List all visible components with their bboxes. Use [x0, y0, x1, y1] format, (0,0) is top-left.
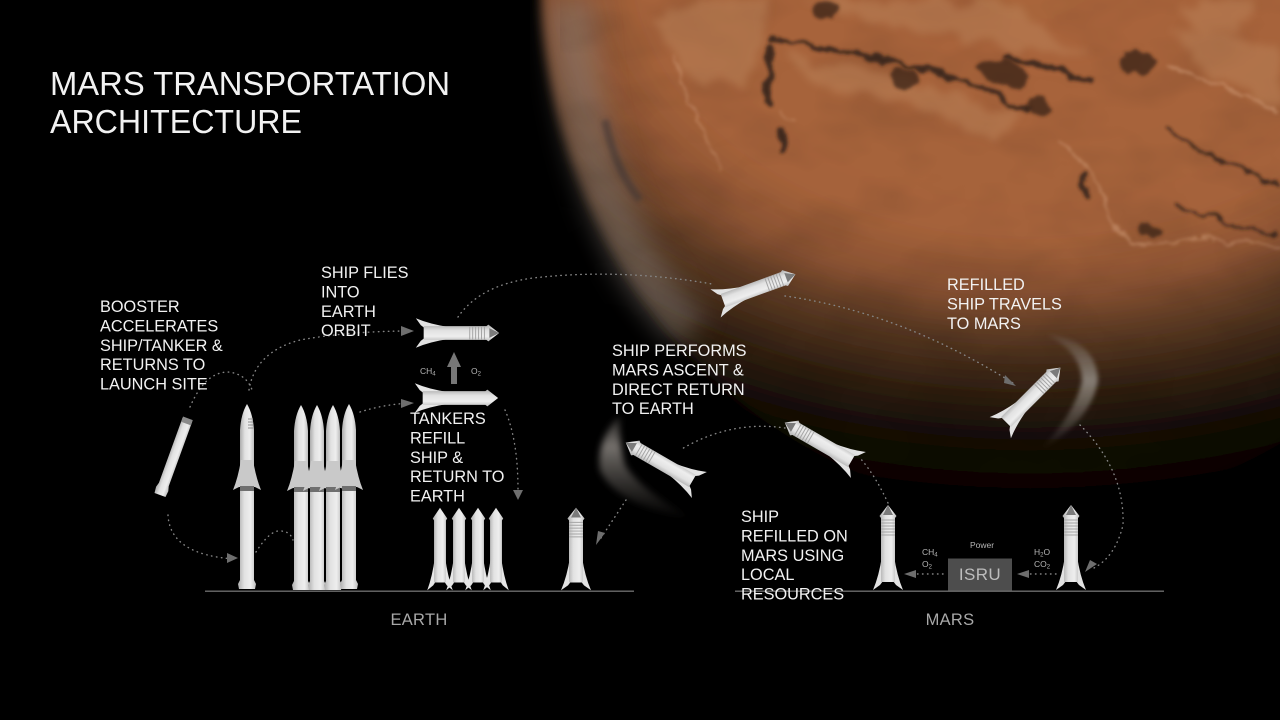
label: products: 4 [934, 552, 938, 558]
label: mars: MARS [926, 611, 974, 629]
step: booster: SHIP/TANKER & [100, 337, 223, 355]
step: tankers: EARTH [410, 488, 465, 506]
surface mottling [582, 0, 1280, 301]
step: earth orbit: INTO [321, 283, 360, 301]
label: CH4 transfer: 4 [432, 372, 436, 378]
path: tankers to orbit [360, 403, 412, 412]
step: refill on mars: SHIP [741, 508, 779, 526]
step: mars ascent: MARS ASCENT & [612, 361, 744, 379]
label: inputs: 2 [1047, 564, 1051, 570]
stack: tankers on boosters [287, 404, 363, 590]
limb cloud streak [605, 120, 640, 200]
step: tankers: RETURN TO [410, 468, 504, 486]
label: inputs: H [1034, 547, 1040, 557]
step: refilled ship: SHIP TRAVELS [947, 295, 1062, 313]
smoke trail: returning ship [599, 415, 695, 520]
step: mars ascent: TO EARTH [612, 400, 694, 418]
path: earth to mars part 2 [785, 296, 1013, 383]
path: tankers return [505, 410, 518, 490]
step: tankers: REFILL [410, 429, 465, 447]
label: products: O [922, 559, 929, 569]
label: inputs: O [1043, 547, 1050, 557]
step: earth orbit: ORBIT [321, 322, 371, 340]
ship outbound above mars [710, 260, 801, 317]
path: earth to mars part 1 [458, 274, 712, 317]
step: refill on mars: LOCAL [741, 566, 794, 584]
lighter eroded highlands [650, 0, 1280, 140]
title: ARCHITECTURE [50, 103, 302, 140]
path: ISRU intake [1022, 573, 1056, 575]
path: mars landing [1080, 425, 1123, 569]
title: MARS TRANSPORTATION [50, 65, 450, 102]
step: refill on mars: REFILLED ON [741, 527, 848, 545]
ISRU plant: ISRU [959, 565, 1001, 584]
propellant transfer arrow [447, 352, 461, 384]
step: tankers: TANKERS [410, 410, 486, 428]
path: booster landing [168, 515, 235, 559]
step: refilled ship: TO MARS [947, 315, 1021, 333]
tanker in orbit [415, 383, 498, 413]
path: ISRU output [910, 573, 943, 575]
falling booster [154, 416, 194, 497]
path: booster to stack [256, 531, 293, 552]
step: refill on mars: MARS USING [741, 547, 844, 565]
smoke trail: refilled ship [1040, 334, 1098, 450]
canyon shadows [769, 40, 1278, 232]
ISRU plant [948, 558, 1012, 590]
ship on mars, refilled [873, 505, 903, 590]
ship ascending from mars [777, 410, 866, 478]
step: tankers: SHIP & [410, 449, 463, 467]
label: products: 2 [929, 564, 933, 570]
step: booster: LAUNCH SITE [100, 376, 208, 394]
step: booster: RETURNS TO [100, 356, 205, 374]
arrowheads [227, 326, 1097, 578]
step: mars ascent: DIRECT RETURN [612, 381, 745, 399]
ship on earth pad [561, 508, 591, 590]
label: earth: EARTH [390, 611, 448, 629]
canyon basins [816, 0, 1163, 237]
refilled ship travelling [990, 357, 1071, 438]
ground line: mars [735, 590, 1164, 592]
step: mars ascent: SHIP PERFORMS [612, 342, 746, 360]
canyon highlights [672, 55, 1278, 250]
label: inputs: 2 [1040, 552, 1044, 558]
label: inputs: CO [1034, 559, 1047, 569]
upper limb haze [572, 0, 690, 330]
mars globe [540, 0, 1280, 510]
path: booster return arc [190, 372, 253, 407]
label: CH4 transfer: CH [420, 366, 432, 376]
step: booster: BOOSTER [100, 298, 180, 316]
step: refilled ship: REFILLED [947, 276, 1025, 294]
step: booster: ACCELERATES [100, 317, 218, 335]
label: O2 transfer: 2 [478, 372, 482, 378]
window detail on stacked ship [248, 419, 253, 428]
path: direct return [680, 426, 785, 450]
dotted flight paths [168, 274, 1123, 574]
step: refill on mars: RESOURCES [741, 586, 844, 604]
path: mars takeoff [860, 458, 888, 503]
step: earth orbit: SHIP FLIES [321, 264, 408, 282]
ship in earth orbit [416, 318, 499, 348]
label: power: Power [970, 540, 994, 550]
ship returning to earth [618, 430, 707, 498]
mars lit surface [540, 0, 1280, 510]
tankers on earth pad [427, 508, 509, 590]
ship on mars, landed [1056, 505, 1086, 590]
label: O2 transfer: O [471, 366, 478, 376]
path: ship into orbit [249, 331, 412, 390]
ground line: earth [205, 590, 634, 592]
step: earth orbit: EARTH [321, 303, 376, 321]
stack: ship on booster [233, 404, 261, 589]
path: return to earth [601, 500, 626, 538]
label: products: CH [922, 547, 934, 557]
